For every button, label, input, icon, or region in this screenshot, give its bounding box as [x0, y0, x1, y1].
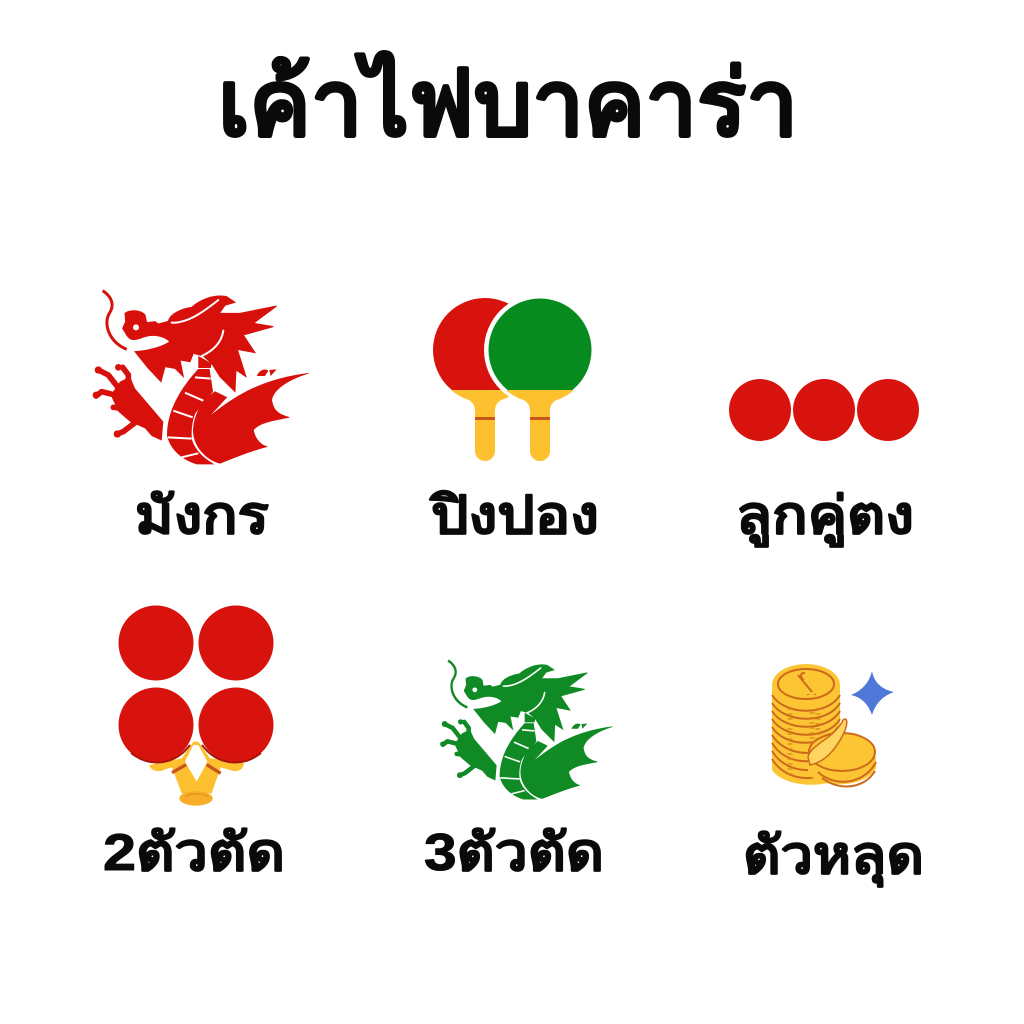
icon: red dragon: [93, 291, 308, 464]
panel: three cut (3ตัวตัด): [424, 661, 613, 882]
panel: pair ball (ลูกคู่ตง): [729, 379, 919, 548]
icon: gold coins: [772, 664, 876, 786]
icon: red and green paddles: [433, 294, 596, 461]
label: two cut: 2ตัวตัด: [103, 824, 285, 882]
icon: three red balls: [729, 379, 919, 441]
panel: single digit (ตัวหลุด): [743, 664, 924, 888]
label: ping pong: ปิงปอง: [429, 487, 599, 545]
title: เค้าไฟบาคาร่า: [218, 51, 798, 155]
icon: four red balls with crossed paddles: [118, 606, 274, 806]
label: single digit: ตัวหลุด: [743, 827, 924, 888]
panel: ping pong (ปิงปอง): [429, 294, 599, 545]
panel: two cut (2ตัวตัด): [103, 606, 285, 882]
label: three cut: 3ตัวตัด: [424, 824, 604, 882]
icon: blue sparkle: [851, 671, 894, 715]
label: dragon: มังกร: [135, 487, 269, 545]
icon: green dragon: [440, 661, 613, 799]
panel: dragon (มังกร): [93, 291, 308, 545]
label: pair ball: ลูกคู่ตง: [736, 487, 914, 548]
